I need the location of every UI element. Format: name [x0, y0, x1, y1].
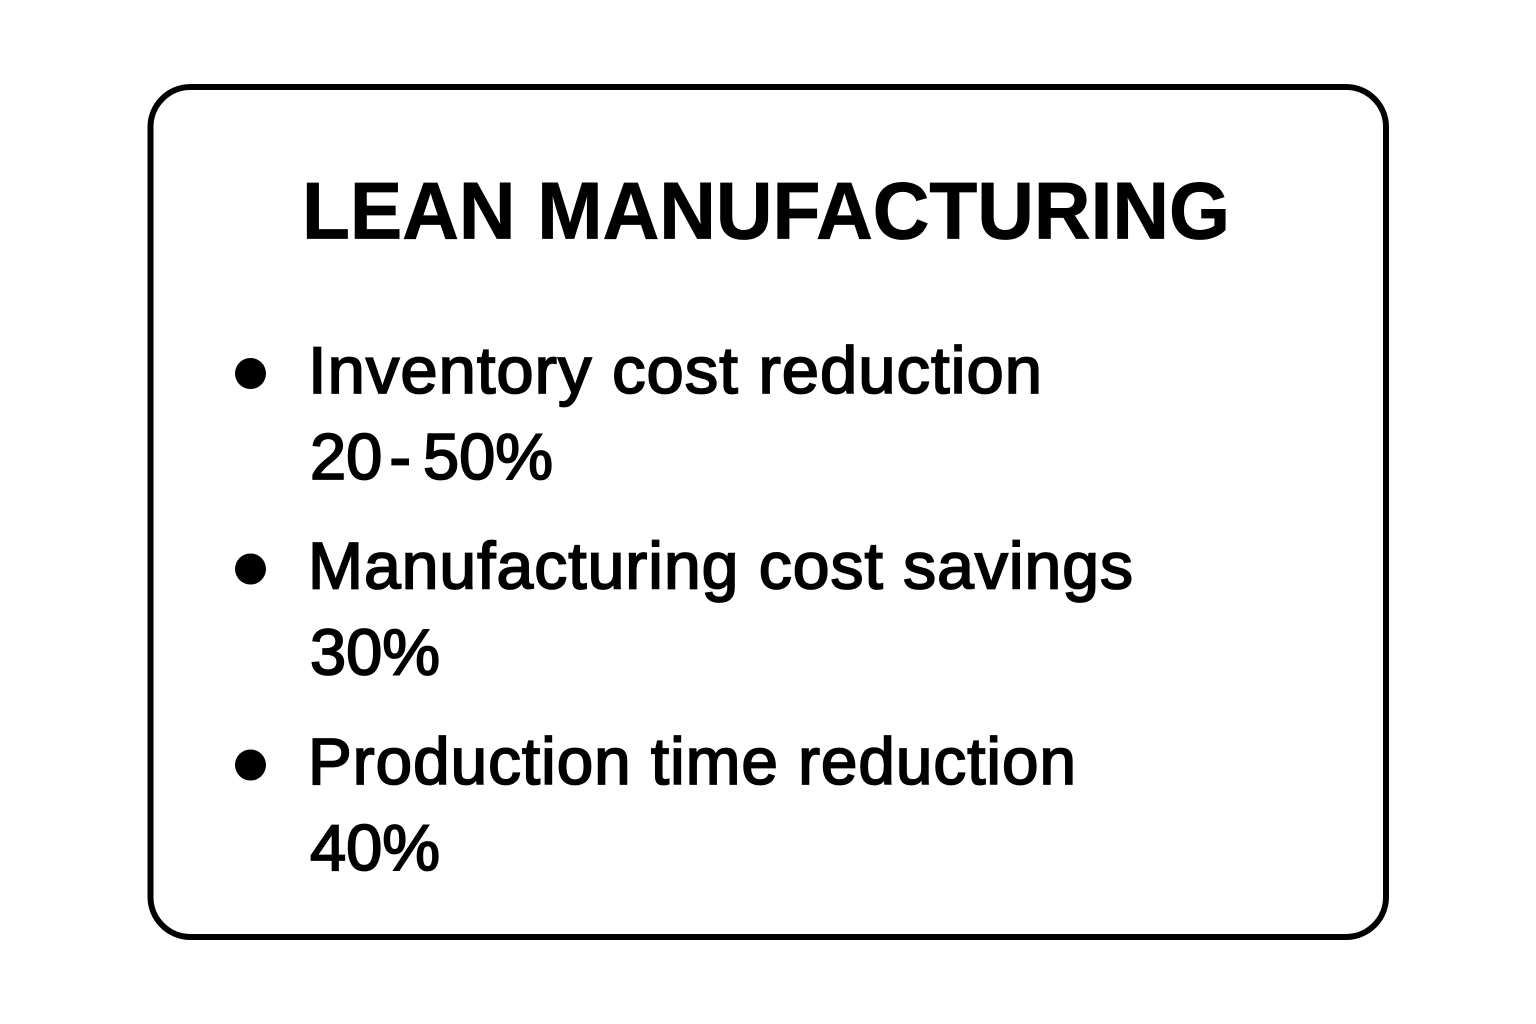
list item: production time reduction: 40% [310, 811, 440, 884]
panel: lean manufacturing card [150, 87, 1386, 937]
list item: inventory cost reduction: 20-50% [310, 420, 553, 493]
list item: manufacturing cost savings: 30% [310, 616, 440, 688]
title: LEAN MANUFACTURING [302, 166, 1230, 256]
list item: inventory cost reduction [235, 333, 1043, 493]
list item: production time reduction [235, 724, 1077, 884]
list item: manufacturing cost savings: Manufacturing cost savings [308, 528, 1134, 602]
list item: inventory cost reduction: Inventory cost reduction [308, 333, 1043, 407]
list item: manufacturing cost savings [235, 528, 1134, 688]
list item: production time reduction: Production time reduction [308, 724, 1077, 798]
